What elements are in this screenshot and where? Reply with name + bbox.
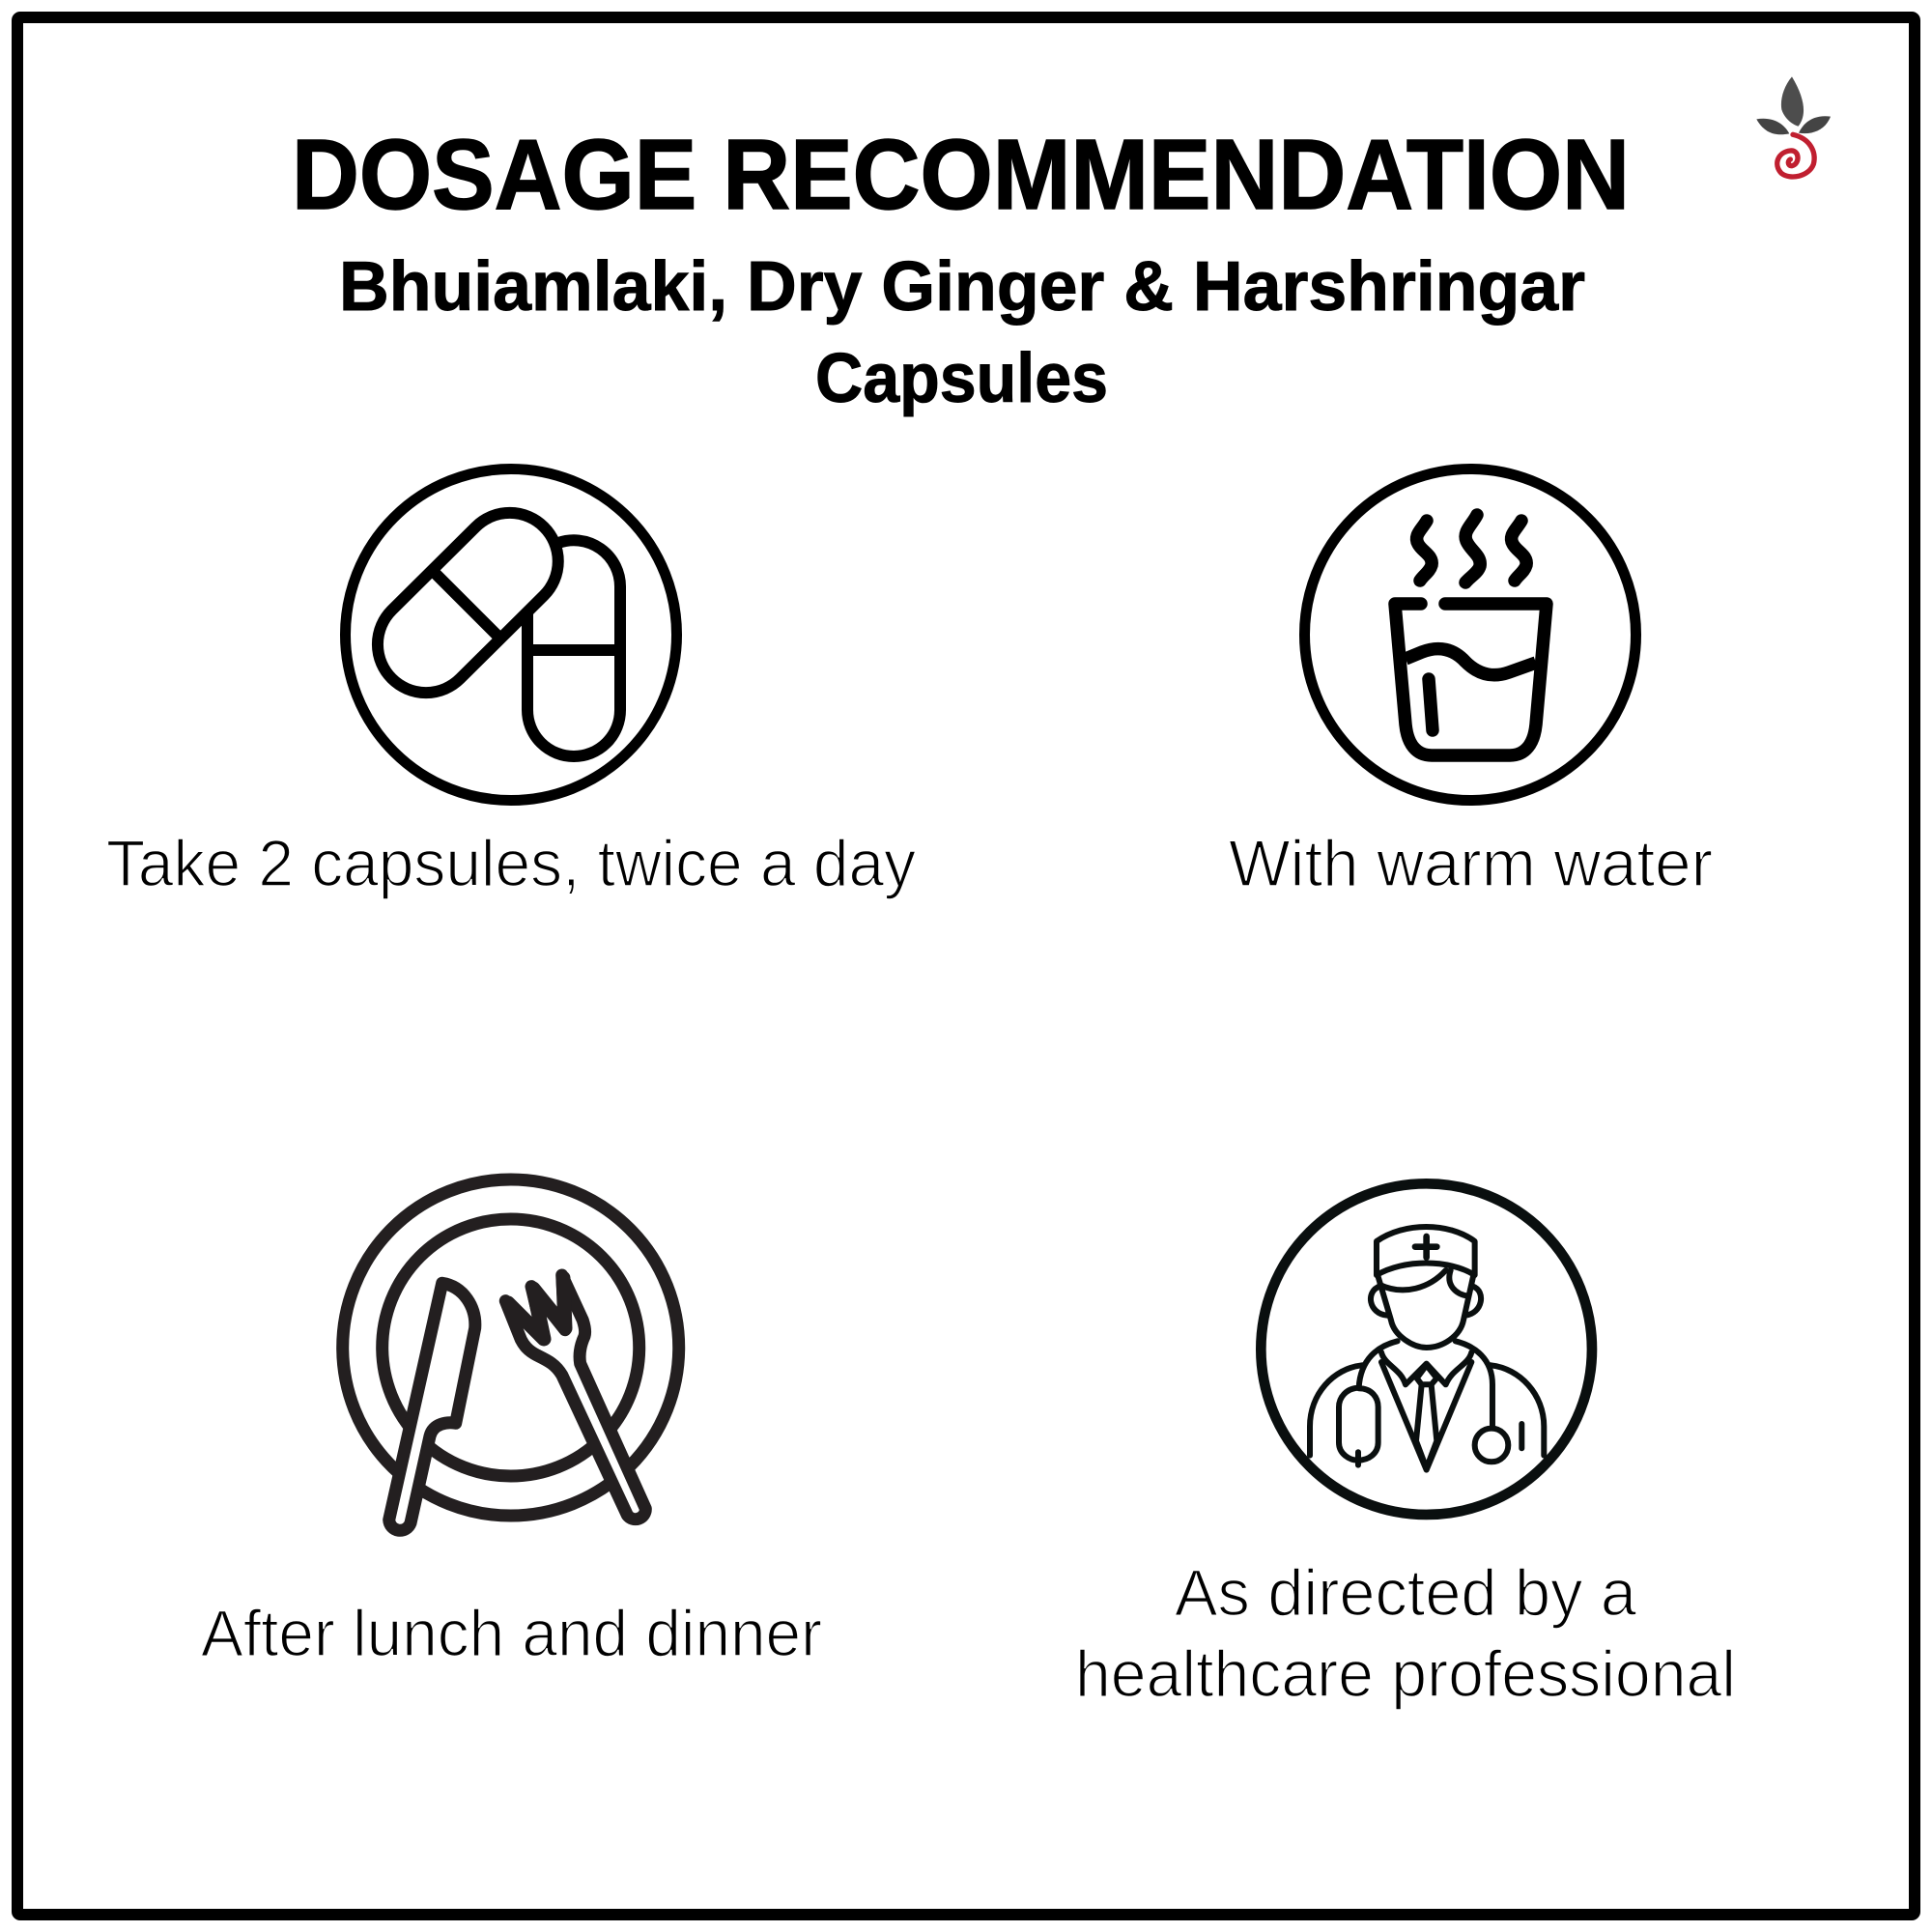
subtitle bbox=[339, 248, 1585, 417]
icon: plate with knife and fork bbox=[343, 1179, 679, 1530]
icon: doctor in circle bbox=[1261, 1183, 1592, 1515]
subtitle: Bhuiamlaki, Dry Ginger & Harshringar bbox=[339, 248, 1585, 326]
subtitle: Capsules bbox=[815, 340, 1108, 417]
panel: healthcare professional bbox=[1075, 1183, 1736, 1711]
panel: after lunch and dinner bbox=[201, 1179, 822, 1670]
label: after lunch and dinner: After lunch and dinner bbox=[201, 1597, 822, 1670]
icon: capsules in circle bbox=[346, 469, 676, 800]
icon: brand logo with leaves and red spiral bbox=[1756, 76, 1831, 177]
label: as directed by a healthcare professional: healthcare professional bbox=[1075, 1637, 1736, 1711]
label: as directed by a healthcare professional bbox=[1075, 1556, 1736, 1711]
panel: warm water bbox=[1229, 469, 1713, 900]
icon: steaming glass in circle bbox=[1304, 469, 1636, 800]
label: take 2 capsules: Take 2 capsules, twice a day bbox=[106, 827, 916, 900]
label: as directed by a healthcare professional: As directed by a bbox=[1175, 1556, 1636, 1630]
panel: take 2 capsules bbox=[106, 469, 916, 900]
title: DOSAGE RECOMMENDATION bbox=[292, 119, 1630, 230]
label: with warm water: With warm water bbox=[1229, 827, 1713, 900]
